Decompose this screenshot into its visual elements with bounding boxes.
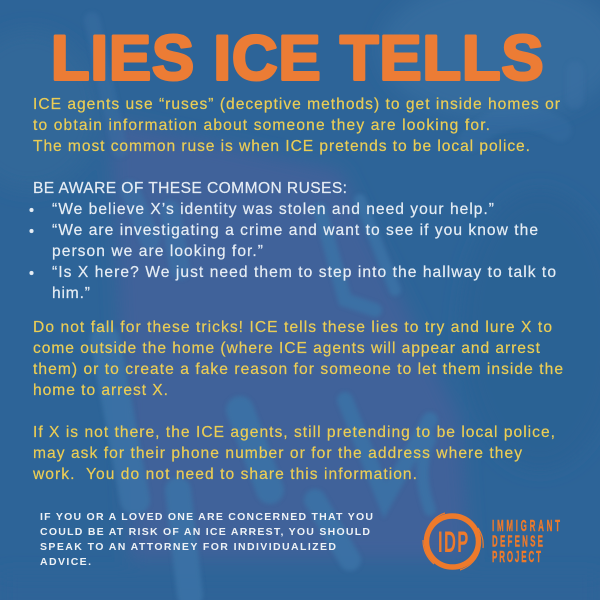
advice paragraph: may ask for their phone number or for the address where they	[33, 445, 522, 462]
bulleted list of ruses	[30, 201, 556, 302]
logo wordmark	[492, 517, 560, 566]
logo: Immigrant Defense Project	[423, 513, 560, 570]
bulleted list of ruses: “Is X here? We just need them to step into the hallway to talk to	[52, 264, 556, 281]
bulleted list of ruses: “We believe X’s identity was stolen and need your help.”	[52, 201, 494, 218]
bulleted list of ruses: him.”	[52, 285, 90, 302]
intro text block: The most common ruse is when ICE pretends to be local police.	[33, 138, 530, 155]
advice paragraph: work. You do not need to share this information.	[32, 466, 417, 483]
warning paragraph	[33, 319, 563, 399]
bulleted list of ruses: “We are investigating a crime and want to see if you know the	[52, 222, 538, 239]
warning paragraph: Do not fall for these tricks! ICE tells these lies to try and lure X to	[33, 319, 552, 336]
footer note: IF YOU OR A LOVED ONE ARE CONCERNED THAT YOU	[40, 511, 373, 523]
advice paragraph	[32, 424, 555, 483]
warning paragraph: home to arrest X.	[33, 382, 168, 399]
logo wordmark: DEFENSE	[492, 533, 543, 550]
warning paragraph: come outside the home (where ICE agents will appear and arrest	[33, 340, 541, 357]
footer note	[40, 511, 373, 568]
icon: brush ring	[423, 513, 483, 570]
footer note: SPEAK TO AN ATTORNEY FOR INDIVIDUALIZED	[40, 541, 336, 553]
warning paragraph: them) or to create a fake reason for someone to let them inside the	[33, 361, 563, 378]
title: LIES ICE TELLS	[51, 24, 544, 94]
advice paragraph: If X is not there, the ICE agents, still pretending to be local police,	[33, 424, 555, 441]
bulleted list of ruses: person we are looking for.”	[52, 243, 263, 260]
logo wordmark: PROJECT	[492, 548, 541, 566]
footer note: ADVICE.	[40, 556, 91, 568]
logo initials: IDP	[438, 526, 468, 559]
footer note: COULD BE AT RISK OF AN ICE ARREST, YOU SHOULD	[40, 526, 370, 538]
intro text block	[33, 96, 560, 155]
intro text block: ICE agents use “ruses” (deceptive methods) to get inside homes or	[33, 96, 560, 113]
logo wordmark: IMMIGRANT	[492, 517, 560, 535]
heading: common ruses: BE AWARE OF THESE COMMON RUSES:	[33, 180, 347, 197]
intro text block: to obtain information about someone they are looking for.	[33, 117, 490, 134]
